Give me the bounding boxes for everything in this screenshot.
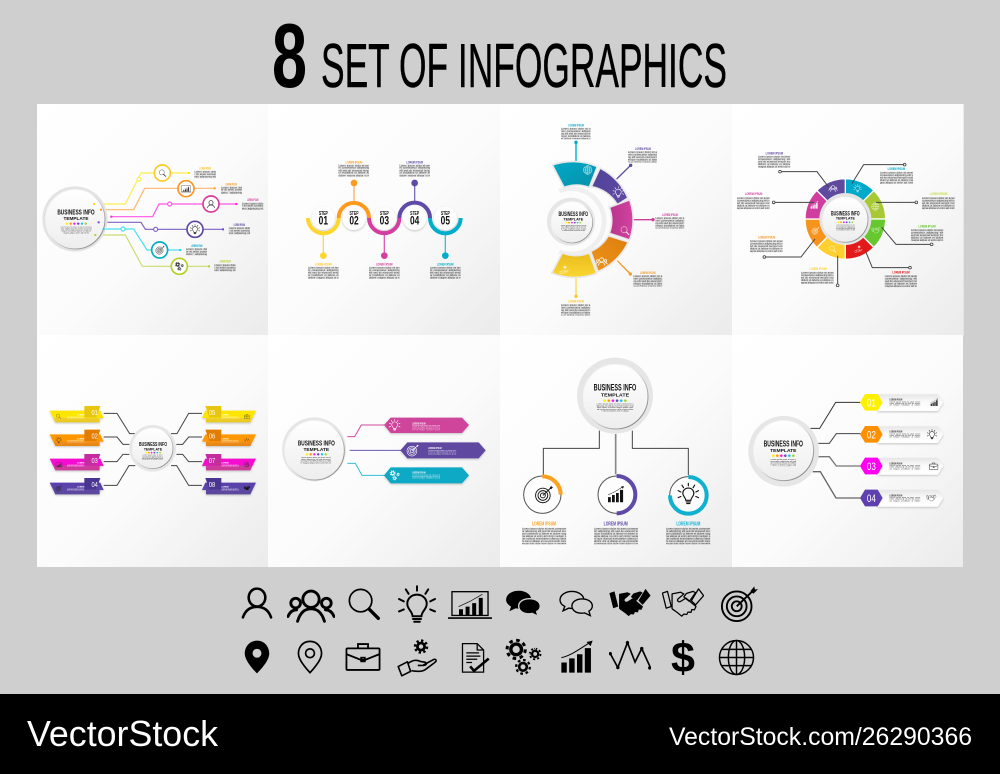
text blocks: LOREM IPSUM (662, 212, 678, 217)
icon: hand with gear (398, 641, 436, 676)
coloured connector lines (94, 173, 236, 266)
footer bar: VectorStock (27, 713, 219, 754)
panel: eight segment donut (732, 104, 964, 336)
text blocks: LOREM IPSUM (219, 260, 231, 264)
ribbon 07: 07 (209, 456, 215, 465)
banner: bulb (384, 418, 469, 433)
card 02: 02 (867, 429, 876, 441)
segment icons (560, 166, 629, 274)
ribbon 06 (202, 430, 256, 446)
ribbon 02: LOREM (77, 438, 85, 440)
ribbon 06: LOREM (221, 438, 229, 440)
icon: briefcase (346, 644, 380, 670)
icon: laptop chart (448, 592, 492, 618)
panel: connector line infographic with six circles (37, 104, 269, 336)
ribbon 01: LOREM (77, 415, 85, 417)
text blocks (737, 150, 955, 287)
card 01: LOREM IPSUM (889, 398, 903, 402)
ribbon 07 (202, 454, 256, 470)
icon: chat bubbles outline (560, 591, 592, 616)
central hub (42, 186, 108, 252)
icon: chat bubbles solid (506, 591, 540, 616)
text blocks (308, 159, 461, 279)
text blocks: LOREM IPSUM (247, 198, 258, 202)
central hub: TEMPLATE (144, 447, 163, 451)
central hub: TEMPLATE (836, 217, 855, 221)
banner: gears: LOREM IPSUM (412, 471, 426, 475)
central hub: BUSINESS INFO (298, 439, 335, 448)
text blocks (561, 123, 684, 316)
step labels: 03 (380, 214, 389, 227)
icon: gears (507, 640, 540, 674)
step labels: 01 (319, 214, 328, 227)
ribbon 08: LOREM (221, 487, 229, 489)
node: bulb (187, 221, 203, 237)
title (272, 6, 727, 107)
ribbon 08: 08 (209, 480, 215, 489)
panel: eight ribbons around a hub (37, 335, 269, 567)
ribbon 01: 01 (91, 408, 98, 417)
leader lines (763, 163, 933, 287)
text blocks: LOREM IPSUM (888, 166, 905, 171)
icon: team (288, 591, 334, 621)
text blocks: LOREM IPSUM (346, 159, 363, 164)
text blocks: LOREM IPSUM (640, 270, 656, 275)
card 04 (860, 490, 943, 507)
footer bar: VectorStock.com/26290366 (669, 723, 972, 751)
step labels: 04 (410, 214, 420, 227)
text blocks: LOREM IPSUM (892, 270, 910, 275)
text blocks (186, 167, 263, 272)
connector lines (104, 413, 202, 485)
ribbon 06: 06 (209, 432, 215, 441)
text blocks: LOREM IPSUM (200, 167, 211, 171)
text blocks: LOREM IPSUM (568, 123, 584, 128)
ribbon 04 (50, 478, 104, 494)
end dots (93, 172, 237, 267)
ribbon 05: LOREM (221, 415, 229, 417)
node: search (154, 165, 170, 181)
ring: target (524, 476, 561, 513)
card 01 (860, 394, 943, 411)
text blocks: LOREM IPSUM (315, 261, 332, 266)
central hub: BUSINESS INFO (831, 211, 860, 217)
icon: handshake outline (662, 589, 704, 616)
card 02 (860, 426, 943, 443)
panel: semicircle segments infographic (500, 104, 732, 336)
banner: target (400, 442, 486, 458)
panel: three hexagon banners (268, 335, 500, 567)
card 04: LOREM IPSUM (889, 493, 903, 497)
card 01: 01 (867, 397, 876, 409)
icon: growth bars (561, 641, 593, 673)
icon: dollar: $ (671, 634, 695, 682)
panel: five step wave timeline (268, 104, 500, 336)
panel: four hexagon numbered cards (732, 335, 963, 567)
step labels: 02 (349, 214, 359, 227)
central hub: TEMPLATE (770, 448, 797, 454)
ribbon 01 (50, 406, 104, 422)
ribbon 08 (202, 478, 256, 494)
card 03: 03 (867, 461, 876, 473)
central hub (129, 425, 176, 472)
central hub: BUSINESS INFO (764, 439, 803, 448)
title: 8 (272, 6, 307, 107)
card 03 (860, 458, 943, 475)
ribbon 04: LOREM (77, 487, 85, 489)
ribbon 04: 04 (91, 480, 98, 489)
ribbon 03 (50, 454, 104, 470)
ribbon 07: LOREM (221, 463, 229, 465)
text blocks: LOREM IPSUM (930, 191, 947, 196)
text blocks: LOREM IPSUM (568, 299, 584, 304)
stems and dots (320, 180, 449, 259)
step labels: STEP (319, 211, 328, 217)
node: gears (171, 258, 187, 274)
central hub: TEMPLATE (63, 216, 89, 221)
step labels (319, 211, 450, 227)
central hub (547, 198, 595, 246)
central hub: BUSINESS INFO (57, 208, 95, 217)
wave (308, 203, 461, 233)
central hub: BUSINESS INFO (139, 442, 167, 448)
connector lines (810, 402, 860, 498)
card 02: LOREM IPSUM (889, 430, 903, 434)
step labels: 05 (441, 214, 450, 227)
text blocks: LOREM IPSUM (604, 522, 628, 528)
icon: user (243, 589, 271, 617)
text blocks: LOREM IPSUM (809, 266, 827, 271)
central hub (748, 416, 819, 487)
icon set (243, 586, 758, 682)
panel: org chart with three progress rings (500, 335, 732, 567)
icon: document check (462, 644, 489, 672)
ribbon 05 (202, 406, 256, 422)
connector lines (347, 425, 401, 475)
icon: zigzag chart (609, 641, 651, 670)
text blocks: LOREM IPSUM (676, 522, 700, 528)
text blocks: LOREM IPSUM (758, 235, 776, 240)
central hub: TEMPLATE (601, 392, 630, 398)
icon: handshake solid (609, 589, 651, 616)
text blocks: LOREM IPSUM (437, 261, 454, 266)
text blocks (522, 522, 710, 544)
connectors (576, 142, 653, 296)
central hub: BUSINESS INFO (558, 212, 588, 218)
donut segments (805, 179, 886, 259)
ribbon 03: 03 (91, 456, 98, 465)
text blocks: LOREM IPSUM (225, 182, 237, 186)
ribbon 02 (50, 430, 104, 446)
banner: target: LOREM IPSUM (428, 446, 442, 450)
text blocks: LOREM IPSUM (766, 150, 783, 155)
icon: search (349, 589, 378, 618)
step labels: STEP (380, 211, 389, 217)
node: target (152, 242, 168, 258)
step labels: STEP (441, 211, 450, 217)
step circles (312, 207, 457, 230)
central hub (819, 193, 871, 245)
central hub: TEMPLATE (563, 217, 584, 221)
text blocks: LOREM IPSUM (532, 522, 556, 528)
text blocks: LOREM IPSUM (191, 244, 202, 248)
central hub (577, 358, 653, 434)
step labels: STEP (410, 211, 419, 217)
node: laptop chart (178, 181, 194, 197)
icon: pin solid (245, 641, 269, 673)
connector lines (543, 431, 688, 475)
segment icons (811, 184, 881, 253)
text blocks: LOREM IPSUM (745, 191, 763, 196)
banner: gears (384, 467, 469, 483)
central hub: TEMPLATE (303, 447, 330, 453)
text blocks: LOREM IPSUM (376, 261, 393, 266)
text blocks: LOREM IPSUM (635, 146, 651, 151)
ribbon 03: LOREM (77, 463, 85, 465)
inner ring (559, 189, 604, 254)
icon: pin outline (298, 641, 322, 673)
icon: bulb (399, 586, 435, 622)
text blocks: LOREM IPSUM (406, 159, 423, 164)
node: user (203, 196, 219, 212)
text blocks: LOREM IPSUM (918, 223, 936, 228)
icon: target (722, 587, 758, 621)
icon: globe (719, 640, 754, 675)
banner: bulb: LOREM IPSUM (412, 421, 426, 425)
ribbon 05: 05 (209, 408, 215, 417)
central hub (282, 417, 346, 481)
ribbon 02: 02 (91, 432, 98, 441)
ring: bulb (670, 477, 707, 514)
central hub: BUSINESS INFO (594, 382, 636, 392)
segments (552, 161, 633, 277)
text blocks: LOREM IPSUM (234, 223, 245, 227)
card 04: 04 (867, 493, 876, 505)
ring: growth bars (598, 476, 635, 513)
footer bar (0, 694, 1000, 774)
step labels: STEP (349, 211, 359, 217)
card 03: LOREM IPSUM (889, 461, 903, 465)
